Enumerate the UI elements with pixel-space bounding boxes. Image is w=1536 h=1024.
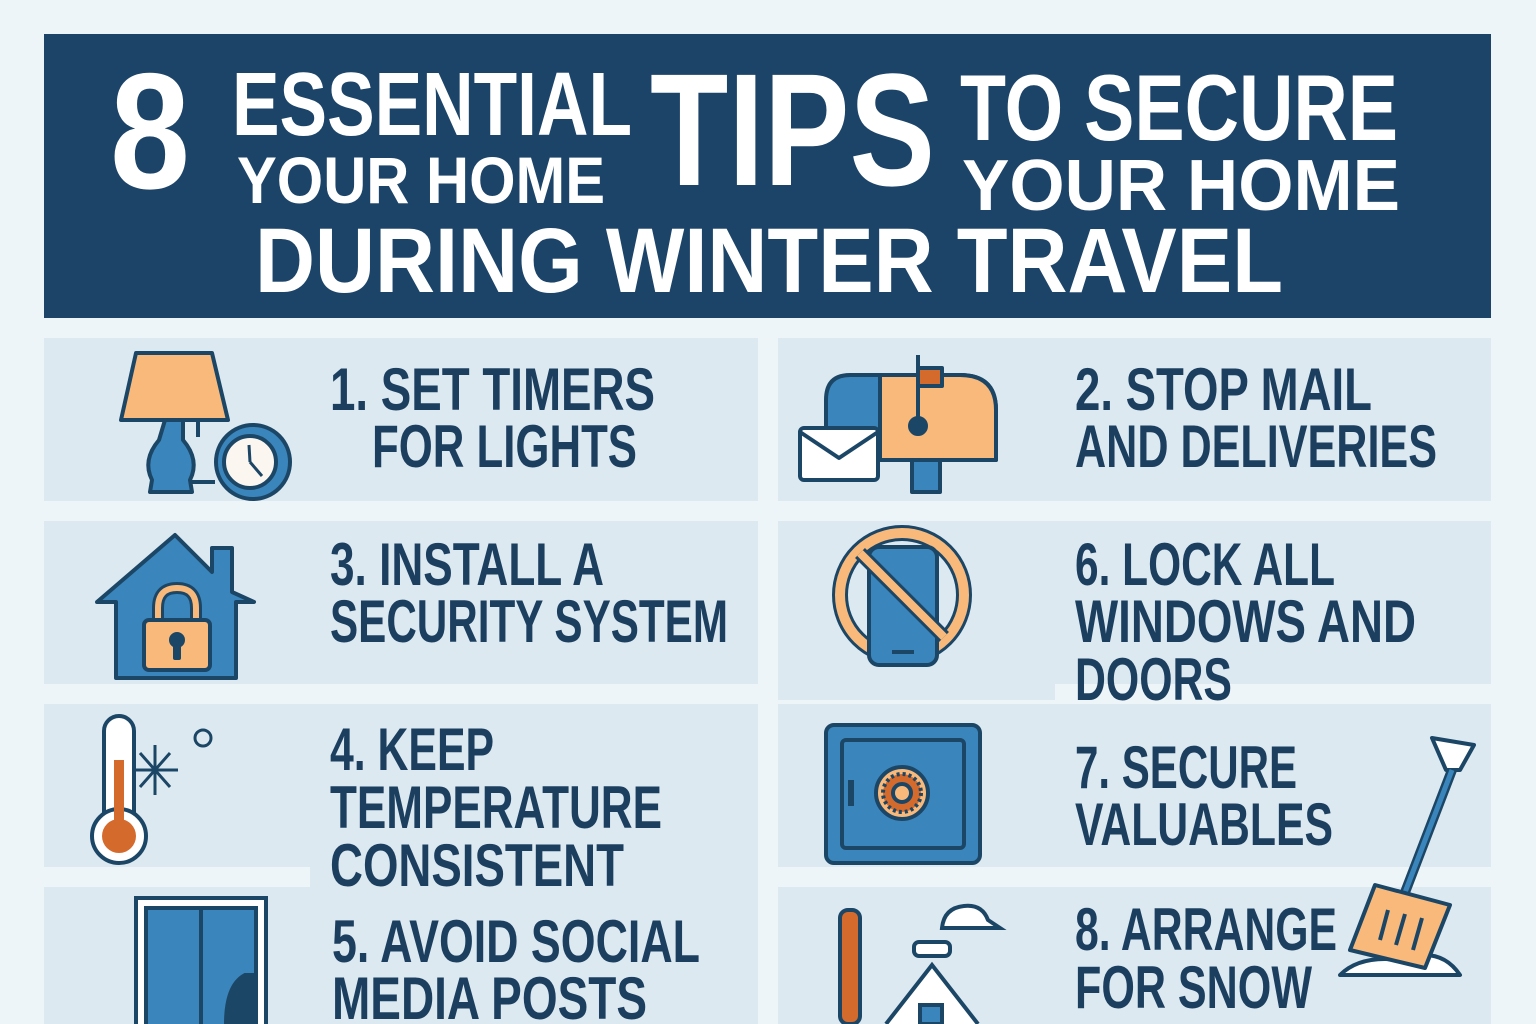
icon: mailbox: [800, 355, 996, 492]
text: tip 7: VALUABLES: [1075, 791, 1333, 858]
panel: tip 2: [778, 338, 1491, 501]
icon: safe: [826, 725, 980, 863]
title: TO SECURE: [960, 55, 1398, 160]
text: tip 4: TEMPERATURE: [330, 774, 662, 841]
text: tip 2: 2. STOP MAIL: [1075, 356, 1372, 423]
icon: no phone: [840, 533, 964, 665]
text: tip 7: 7. SECURE: [1075, 734, 1297, 801]
text: tip 5: [332, 908, 700, 1024]
text: tip 1: [330, 356, 655, 480]
panel: tip 1: [44, 338, 758, 501]
icon: house with lock: [97, 535, 254, 678]
title: 8: [110, 39, 190, 223]
text: tip 4: 4. KEEP: [330, 716, 494, 783]
text: tip 2: [1075, 356, 1437, 480]
icon: lamp and clock: [121, 353, 290, 499]
title: ESSENTIAL: [232, 55, 632, 155]
text: tip 1: 1. SET TIMERS: [330, 356, 655, 423]
text: tip 3: 3. INSTALL A: [330, 531, 604, 598]
text: tip 4: CONSISTENT: [330, 832, 624, 899]
title: TIPS: [650, 40, 935, 219]
panel: tip 3: [44, 521, 758, 684]
panel: tip 4: [44, 704, 758, 899]
title: YOUR HOME: [237, 143, 605, 217]
text: tip 6: DOORS: [1075, 646, 1232, 713]
text: tip 8: [1075, 896, 1337, 1021]
text: tip 3: [330, 531, 728, 655]
text: tip 6: 6. LOCK ALL: [1075, 531, 1335, 598]
text: tip 8: 8. ARRANGE: [1075, 896, 1337, 963]
text: tip 7: [1075, 734, 1333, 858]
text: tip 6: [1075, 531, 1416, 713]
icon: thermometer and snowflake: [92, 716, 211, 863]
title: DURING WINTER TRAVEL: [255, 210, 1283, 312]
text: tip 1: FOR LIGHTS: [372, 413, 637, 480]
panel: tip 8: [778, 738, 1491, 1024]
header banner: [44, 34, 1491, 318]
icon: snow shovel: [1340, 738, 1474, 975]
text: tip 3: SECURITY SYSTEM: [330, 588, 728, 655]
text: tip 8: FOR SNOW: [1075, 954, 1312, 1021]
panel: tip 5: [44, 887, 758, 1024]
text: tip 6: WINDOWS AND: [1075, 588, 1416, 655]
panel: tip 7: [778, 704, 1491, 867]
icon: door: [136, 898, 266, 1024]
text: tip 5: 5. AVOID SOCIAL: [332, 908, 700, 975]
title: [110, 39, 1400, 312]
title: YOUR HOME: [962, 146, 1400, 226]
panel: tip 6: [778, 521, 1491, 713]
text: tip 4: [330, 716, 662, 899]
icon: shovel, house and cloud: [840, 906, 1000, 1024]
